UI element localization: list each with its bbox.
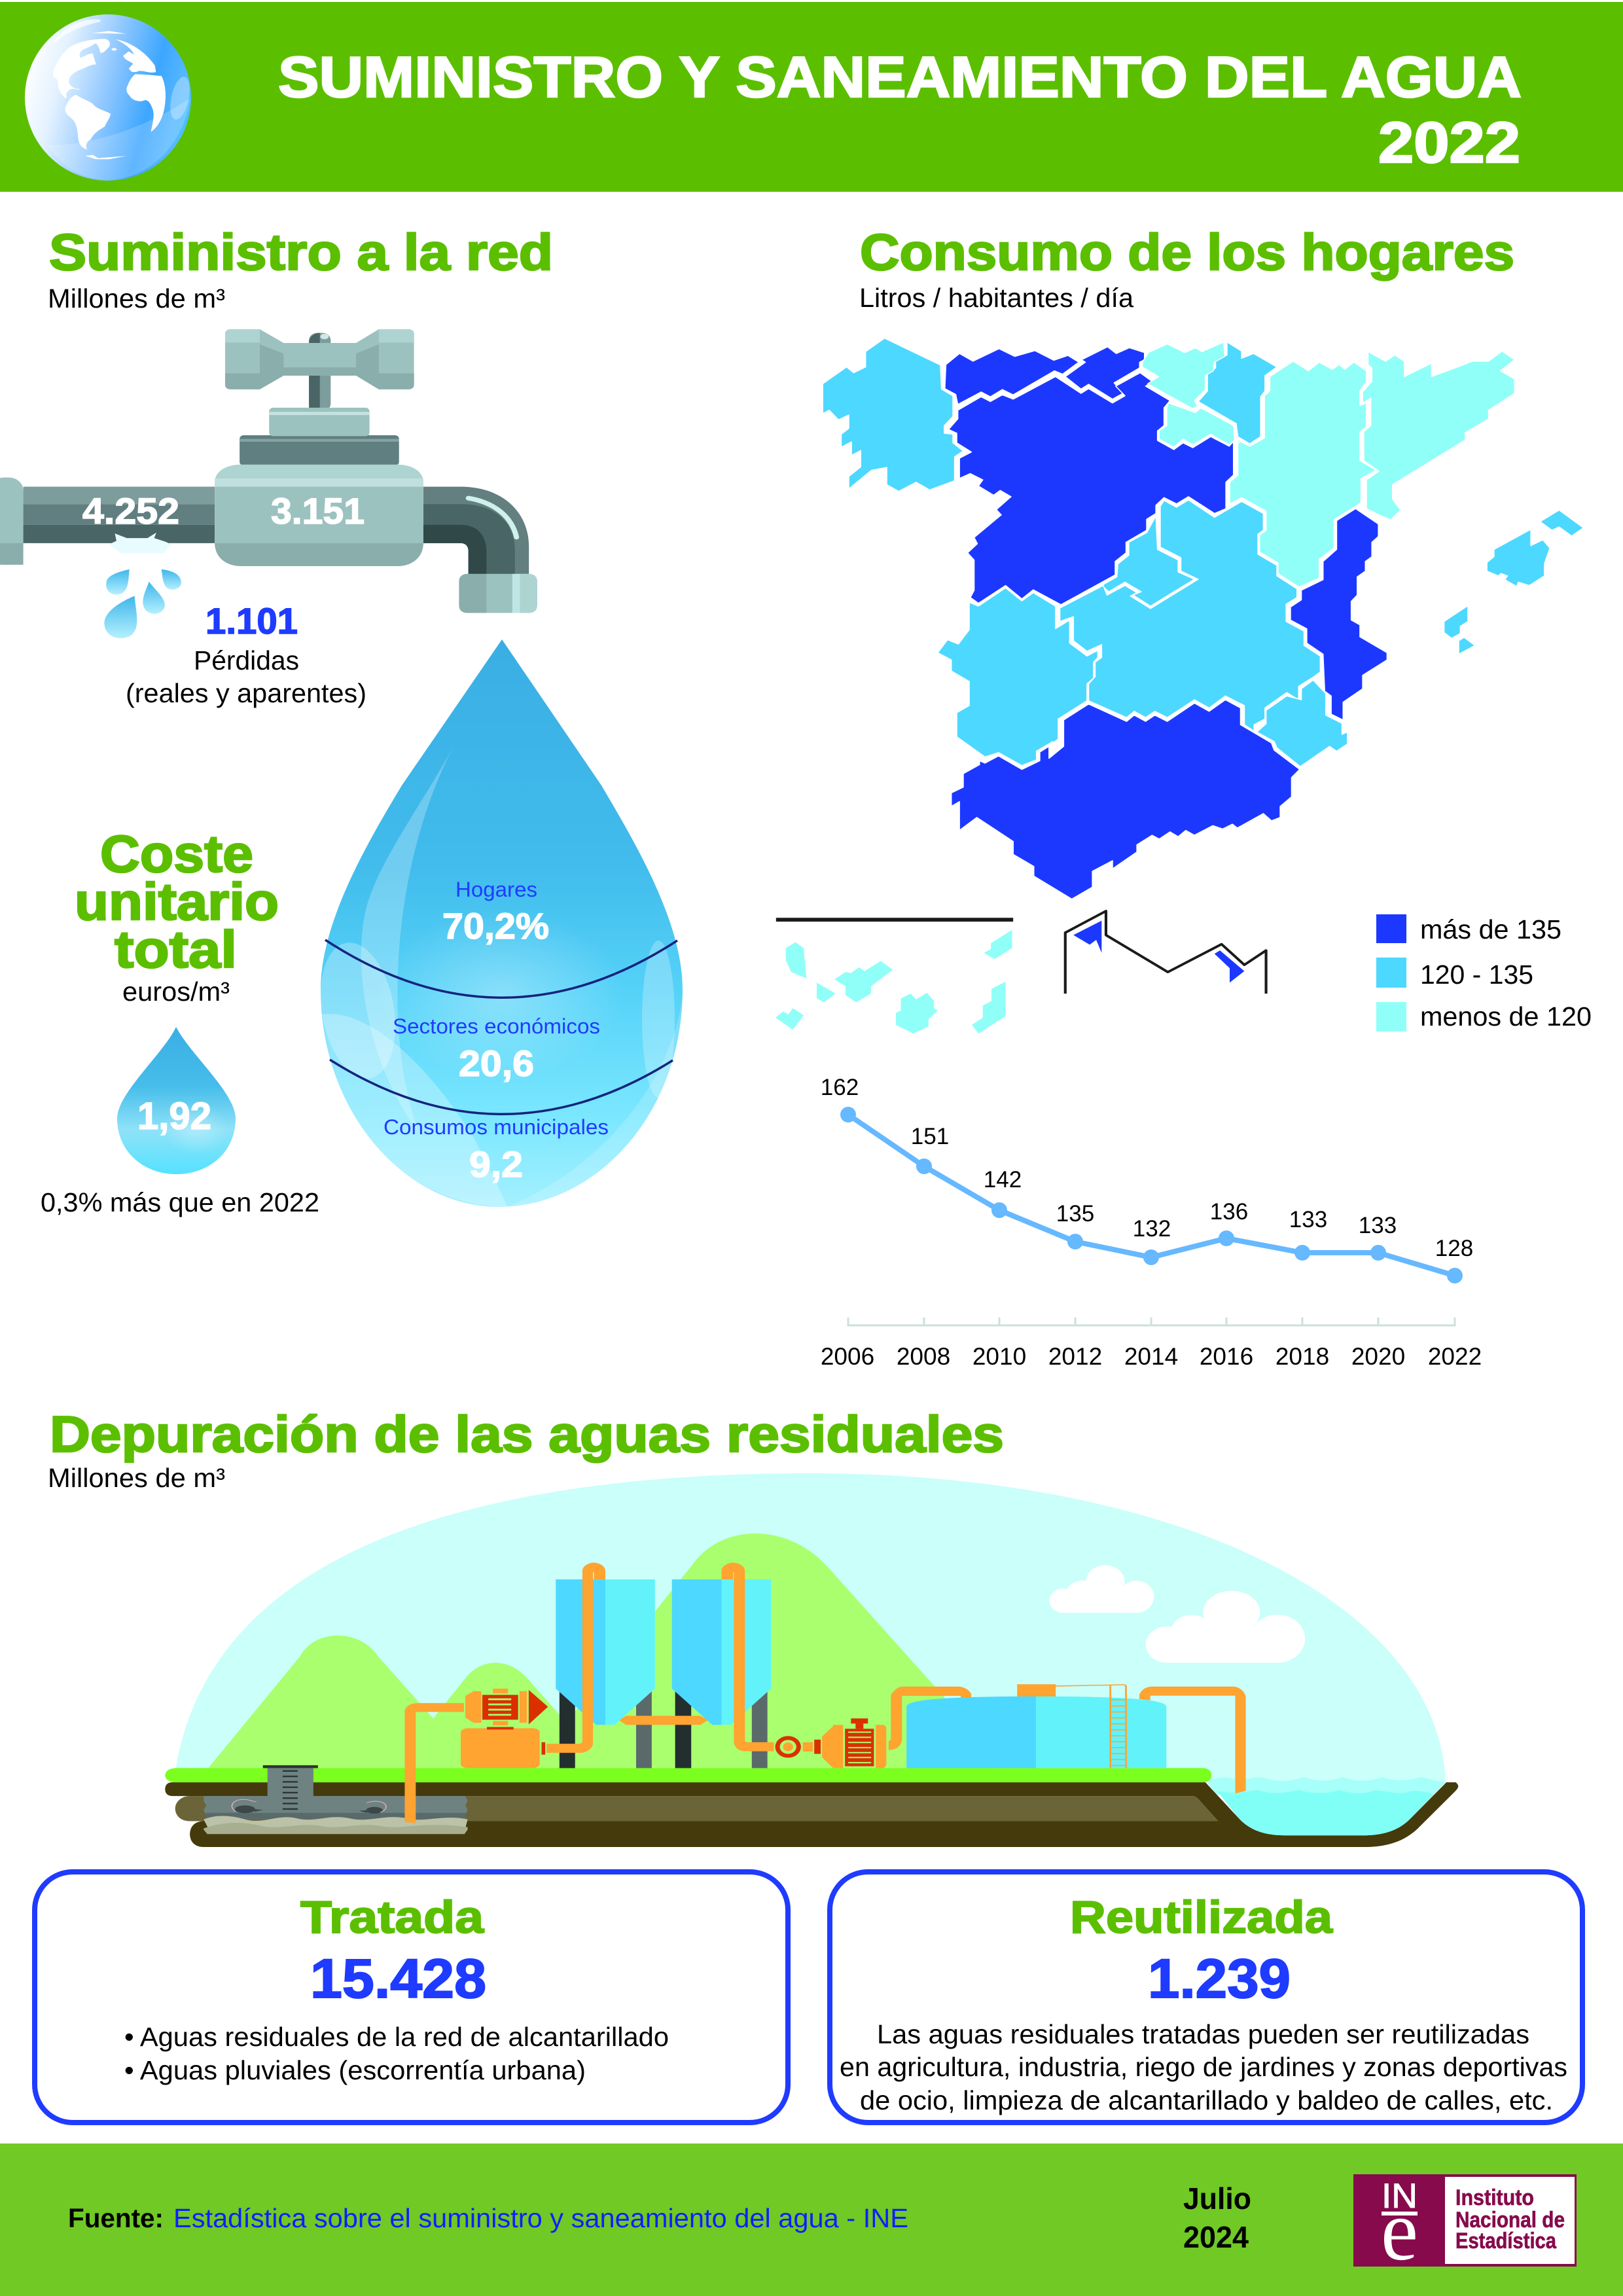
footer band [0,2144,1623,2296]
source text: Estadística sobre el suministro y saneamiento del agua - INE [173,2203,908,2233]
panel value: 1.239 [1148,1948,1291,2009]
data labels: 162 [821,1075,859,1100]
logo: INE: e [1381,2182,1418,2278]
sky dome [175,1473,1446,1784]
ceuta and melilla inset [1065,911,1266,994]
icon: water tap with pipe [0,329,537,638]
illustration: wastewater treatment plant [165,1473,1458,1847]
canary islands frame line [776,918,1013,922]
data labels: 142 [984,1167,1022,1193]
data labels: 136 [1210,1199,1248,1225]
header banner [0,2,1623,192]
pipes [404,1562,774,1823]
river water [1207,1777,1446,1835]
value: losses 1.101: 1.101 [205,600,298,641]
divider curve 1 [325,940,677,997]
axis year labels [821,1343,1482,1370]
value: 1,92: 1,92 [137,1095,211,1138]
logo: INE: Nacional de [1455,2208,1565,2233]
sewer tunnel [204,1765,468,1834]
data labels: 128 [1435,1236,1473,1261]
label: sectores economicos: Sectores económicos [393,1014,600,1038]
ladder [1056,1685,1126,1768]
title: SUMINISTRO Y SANEAMIENTO DEL AGUA [278,45,1522,109]
logo: INE [1353,2174,1577,2278]
axis year labels: 2018 [1275,1343,1329,1370]
data labels: 132 [1133,1216,1171,1242]
units: litros: Litros / habitantes / día [859,283,1133,313]
value: hogares: 70,2% [442,905,549,946]
legend item: mas de 135: más de 135 [1420,914,1561,944]
bullet list: • Aguas residuales de la red de alcantarillado [124,2022,669,2052]
value: consumos: 9,2 [469,1143,523,1185]
pipe burst splash [109,533,172,553]
description: en agricultura, industria, riego de jardines y zonas deportivas [840,2052,1567,2082]
axis year labels: 2014 [1124,1343,1178,1370]
heading: coste unitario total [75,825,279,978]
legend [1376,914,1592,1031]
legend item: 120-135: 120 - 135 [1420,960,1533,990]
title year: 2022 [1378,110,1520,175]
label: reales y aparentes: (reales y aparentes) [126,678,366,708]
legend item: menos de 120: menos de 120 [1420,1001,1592,1031]
pump 1 [461,1689,548,1768]
value: supplied 4.252: 4.252 [82,490,179,531]
date: Julio [1183,2181,1251,2215]
date: 2024 [1183,2220,1249,2254]
region group: more than 135 [945,347,1387,899]
logo: INE: Instituto [1455,2185,1534,2210]
label: hogares: Hogares [455,878,537,901]
bullet list: • Aguas pluviales (escorrentía urbana) [124,2055,586,2085]
data labels [821,1075,1473,1261]
axis year labels: 2022 [1428,1343,1482,1370]
region group: less than 120 [776,342,1514,1033]
logo: INE: Estadística [1455,2229,1557,2253]
valve [776,1736,821,1758]
connecting pipe between silos [619,1716,707,1725]
hills [208,1534,993,1768]
legend item: 120-135 [1376,958,1533,990]
grass [165,1768,1211,1782]
label: perdidas: Pérdidas [194,645,299,675]
value: sectores: 20,6 [459,1043,534,1084]
divider curve 2 [330,1060,673,1114]
data labels: 135 [1056,1201,1094,1227]
value: delivered 3.151: 3.151 [271,490,365,531]
description [840,2019,1567,2115]
date [1183,2181,1251,2254]
map of Spain by region [776,338,1584,1033]
units: euros/m3: euros/m³ [122,977,230,1007]
heading: coste unitario total: Coste [100,825,253,883]
bullet list [124,2022,669,2085]
outlet pipes [889,1684,1246,1793]
line chart: consumption 2006-2022 [821,1075,1482,1370]
icon: leak drops [104,569,181,638]
silo 2 [672,1579,771,1725]
big water drop breakdown [311,639,683,1207]
label: consumos municipales: Consumos municipales [383,1115,609,1139]
heading: consumo de los hogares: Consumo de los hogares [860,223,1514,281]
source label: Fuente: [68,2203,164,2233]
description: de ocio, limpieza de alcantarillado y baldeo de calles, etc. [860,2085,1553,2115]
storage tank [906,1685,1166,1768]
logo: INE: IN [1382,2177,1418,2215]
units: millones de m3: Millones de m³ [48,283,225,314]
heading: suministro a la red: Suministro a la red [49,223,553,281]
heading: coste unitario total: total [115,920,237,978]
panel heading: Tratada [300,1892,484,1943]
region group: 120 to 135 [823,338,1584,766]
silo 1 [556,1579,655,1725]
axis year labels: 2006 [821,1343,874,1370]
axis year labels: 2008 [897,1343,950,1370]
icon: globe [25,14,193,181]
panel: tratada [35,1872,788,2123]
panel value: 15.428 [310,1948,486,2009]
data line [848,1115,1455,1276]
axis year labels: 2010 [972,1343,1026,1370]
axis year labels: 2012 [1048,1343,1102,1370]
icon: rats [232,1799,386,1814]
description: Las aguas residuales tratadas pueden ser reutilizadas [877,2019,1529,2049]
axis [848,1318,1455,1325]
data labels: 133 [1289,1207,1327,1232]
axis year labels: 2020 [1351,1343,1405,1370]
units: millones de m3: Millones de m³ [48,1463,225,1493]
data labels: 133 [1359,1213,1397,1238]
heading: depuracion: Depuración de las aguas residuales [50,1405,1004,1463]
data points [840,1107,1463,1283]
clouds [1049,1565,1305,1663]
data labels: 151 [911,1124,949,1149]
panel: reutilizada [830,1872,1582,2123]
soil [175,1796,1219,1821]
axis year labels: 2016 [1200,1343,1253,1370]
pump 2 [822,1719,886,1768]
silo legs [560,1691,768,1768]
small water drop with unit cost [117,1027,236,1174]
note: change: 0,3% más que en 2022 [41,1187,319,1217]
heading: coste unitario total: unitario [75,872,279,931]
panel heading: Reutilizada [1070,1892,1333,1943]
